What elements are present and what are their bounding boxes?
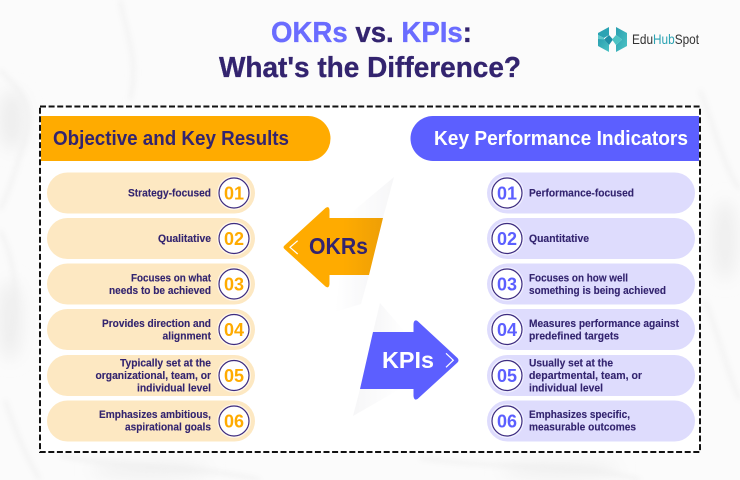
KPI item 05: 05 <box>497 366 517 386</box>
title <box>219 17 521 84</box>
KPI item 01 <box>487 172 695 214</box>
KPI item 05: departmental, team, or <box>529 370 643 382</box>
title: OKRs vs. KPIs: <box>271 17 472 49</box>
OKR item 01 <box>47 172 255 214</box>
KPI item 04 <box>487 309 695 350</box>
KPI item 03: something is being achieved <box>529 285 666 297</box>
KPI item 02: 02 <box>497 229 517 249</box>
OKR item 02 <box>47 218 255 259</box>
KPI item 01: Performance-focused <box>529 188 634 200</box>
header: Key Performance Indicators <box>411 116 699 161</box>
OKR item 05: individual level <box>137 382 211 394</box>
OKR item 05: Typically set at the <box>120 358 211 370</box>
KPI item 02: Quantitative <box>529 233 589 245</box>
KPI item 06: Emphasizes specific, <box>529 409 630 421</box>
OKR item 03 <box>47 264 255 304</box>
KPI item 03: Focuses on how well <box>529 272 628 284</box>
KPI item 03: 03 <box>497 274 517 294</box>
OKR item 06 <box>47 400 255 442</box>
header: Key Performance Indicators: Key Performance Indicators <box>434 127 688 150</box>
KPI item 05: individual level <box>529 382 603 394</box>
KPI item 04: 04 <box>497 320 517 340</box>
OKR item 03: Focuses on what <box>131 272 211 284</box>
OKR item 04 <box>47 309 255 350</box>
panel: KPI list <box>487 172 695 442</box>
OKR item 04: alignment <box>162 330 211 342</box>
OKR item 05: organizational, team, or <box>96 370 212 382</box>
OKR item 06: 06 <box>224 412 244 432</box>
OKR item 03: 03 <box>224 274 244 294</box>
OKR item 06: aspirational goals <box>125 422 211 434</box>
logo: EduHubSpot: EduHubSpot <box>632 31 699 47</box>
KPI item 01: 01 <box>497 184 517 204</box>
panel: OKR list <box>47 172 255 442</box>
OKR item 05 <box>47 355 255 396</box>
KPI item 06: measurable outcomes <box>529 422 636 434</box>
KPI item 02 <box>487 218 695 259</box>
KPI item 05: Usually set at the <box>529 358 613 370</box>
OKR item 04: 04 <box>224 320 244 340</box>
KPI item 06 <box>487 400 695 442</box>
title: What's the Difference? <box>219 52 521 84</box>
OKR item 06: Emphasizes ambitious, <box>99 409 211 421</box>
OKR item 02: Qualitative <box>158 233 211 245</box>
header: Objective and Key Results: Objective and Key Results <box>53 127 289 150</box>
OKR item 01: Strategy-focused <box>128 188 211 200</box>
KPI item 03 <box>487 264 695 304</box>
arrow: KPIs: KPIs <box>382 347 434 373</box>
KPI item 04: predefined targets <box>529 330 619 342</box>
KPI item 04: Measures performance against <box>529 318 679 330</box>
dashed frame panel <box>40 106 700 452</box>
header: Objective and Key Results <box>41 116 330 161</box>
OKR item 04: Provides direction and <box>102 318 211 330</box>
arrow: OKRs <box>284 177 394 312</box>
OKR item 03: needs to be achieved <box>109 285 211 297</box>
logo: EduHubSpot <box>598 27 699 52</box>
OKR item 02: 02 <box>224 229 244 249</box>
KPI item 06: 06 <box>497 412 517 432</box>
OKR item 01: 01 <box>224 184 244 204</box>
KPI item 05 <box>487 355 695 396</box>
arrow: KPIs <box>353 303 458 416</box>
arrow: OKRs: OKRs <box>309 233 368 259</box>
OKR item 05: 05 <box>224 366 244 386</box>
